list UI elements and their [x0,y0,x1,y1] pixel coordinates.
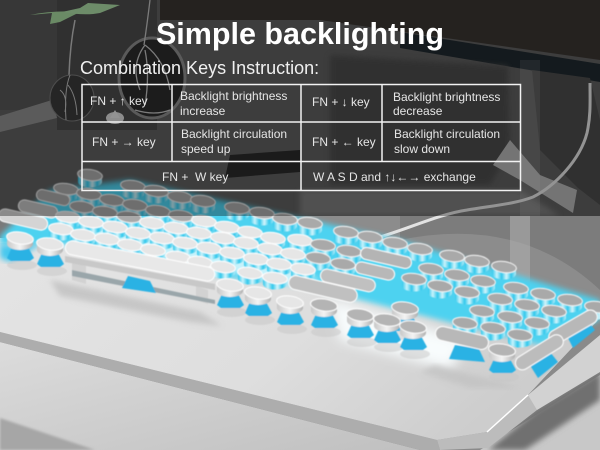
key combination table [82,84,520,190]
row 2: FN + ← key [312,135,376,149]
cyan glow [0,180,600,345]
lower backdrop right [220,216,600,320]
shift key row [0,208,533,348]
tab key row [35,188,567,324]
row 2: Backlight circulation [181,127,287,141]
plate front strip [0,332,440,450]
plant and glass ball [30,0,185,124]
table grid [82,84,520,190]
space bar [64,240,216,304]
title: Simple backlighting [156,17,444,51]
row 2 [92,127,500,156]
row 2: FN + → key [92,135,156,149]
row 1: Backlight brightness [180,89,287,103]
row 3: FN + W key [162,170,228,184]
caps lock row [17,199,550,336]
row 1: FN + ↓ key [312,95,370,109]
soft reflections [50,280,222,326]
row 1 [90,89,500,118]
right body [437,393,537,450]
wall and upper desk [0,0,600,216]
numpad keys [434,307,600,382]
desk surface [0,342,420,450]
row 2: slow down [394,142,450,156]
power cable [380,83,590,237]
row 1: Backlight brightness [393,90,500,104]
row 1: increase [180,104,226,118]
plate top [0,238,600,440]
dark overlay panel [0,0,600,216]
bottom row keys [6,230,430,359]
row 1: FN + ↑ key [90,94,148,108]
function key row [77,168,517,280]
row 2: speed up [181,142,231,156]
keyboard plate [0,180,600,450]
row 1: decrease [393,104,443,118]
number key row [53,182,600,320]
subtitle: Combination Keys Instruction: [80,58,319,78]
keycaps [0,168,600,382]
row 3 [162,170,476,184]
monitor stand [330,55,510,185]
row 2: Backlight circulation [394,127,500,141]
row 3: W A S D and ↑↓←→ exchange [313,170,476,184]
